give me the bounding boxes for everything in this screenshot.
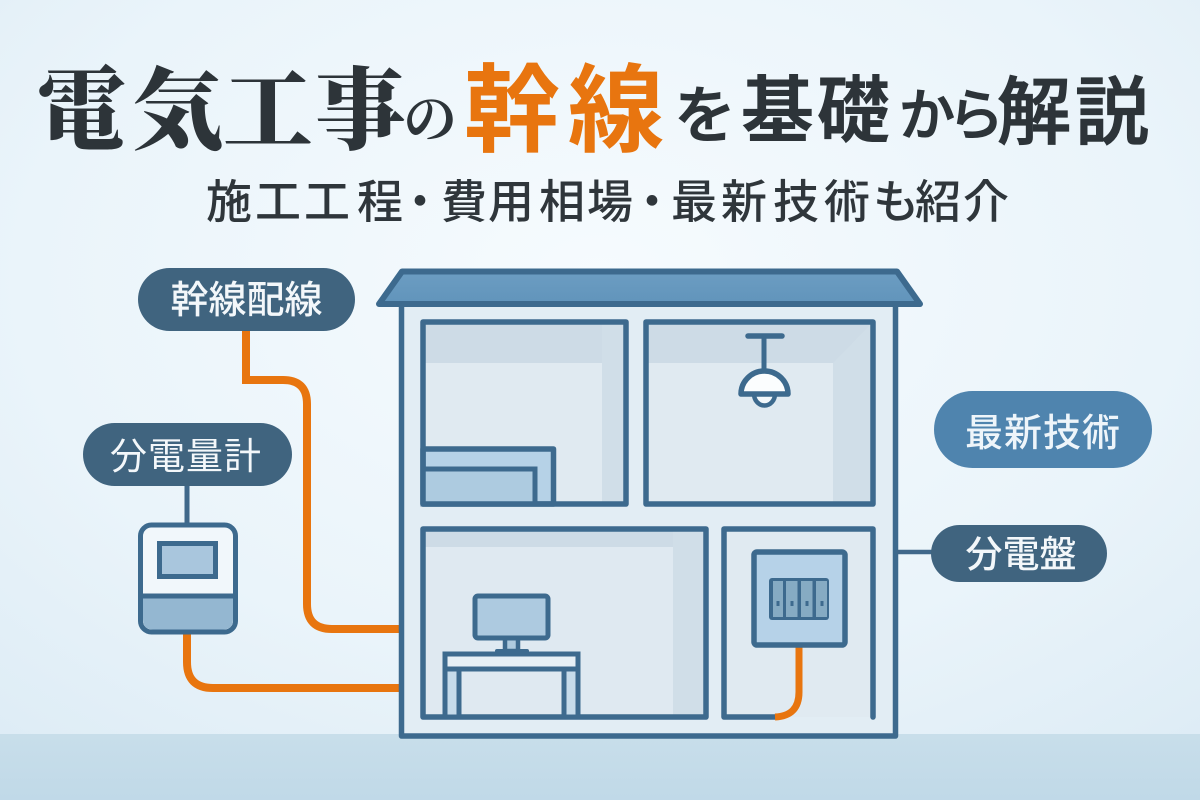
label: 分電盤: 分電盤: [966, 534, 1076, 575]
board connector: [897, 550, 932, 554]
house body: [402, 300, 896, 736]
title: 解説: [997, 71, 1149, 154]
room: lower right with distribution board: [724, 529, 873, 717]
label: 分電量計: 分電量計: [110, 436, 262, 477]
title: を: [674, 82, 736, 151]
title: から: [899, 84, 1004, 147]
wire: meter to house: [187, 632, 400, 688]
room: lower left with desk: [423, 529, 706, 717]
title: 基礎: [741, 71, 890, 152]
ground band: [0, 734, 1200, 800]
label: 分電盤: [931, 525, 1107, 582]
label: 幹線配線: 幹線配線: [170, 280, 323, 322]
title: [36, 58, 1149, 165]
title: の: [403, 90, 457, 150]
icon: desk: [445, 654, 578, 717]
room: upper right with lamp: [646, 322, 873, 504]
subtitle: 施工工程・費用相場・最新技術も紹介: [206, 176, 1009, 228]
title: 幹線: [464, 58, 664, 165]
roof: [379, 272, 920, 304]
title: 電気工事: [36, 63, 405, 162]
meter connector: [184, 486, 190, 527]
icon: distribution board: [754, 552, 845, 645]
wire: 幹線配線 to house: [246, 331, 400, 629]
label: 最新技術: [934, 391, 1152, 468]
label: 分電量計: [83, 423, 292, 486]
house: [379, 272, 920, 736]
icon: electric meter: [140, 525, 236, 632]
room: upper left with sofa: [423, 322, 626, 504]
icon: ceiling lamp: [741, 336, 788, 406]
icon: monitor: [475, 596, 548, 654]
wire: board to floor: [775, 645, 799, 717]
label: 幹線配線: [138, 268, 355, 331]
label: 最新技術: 最新技術: [965, 413, 1121, 455]
